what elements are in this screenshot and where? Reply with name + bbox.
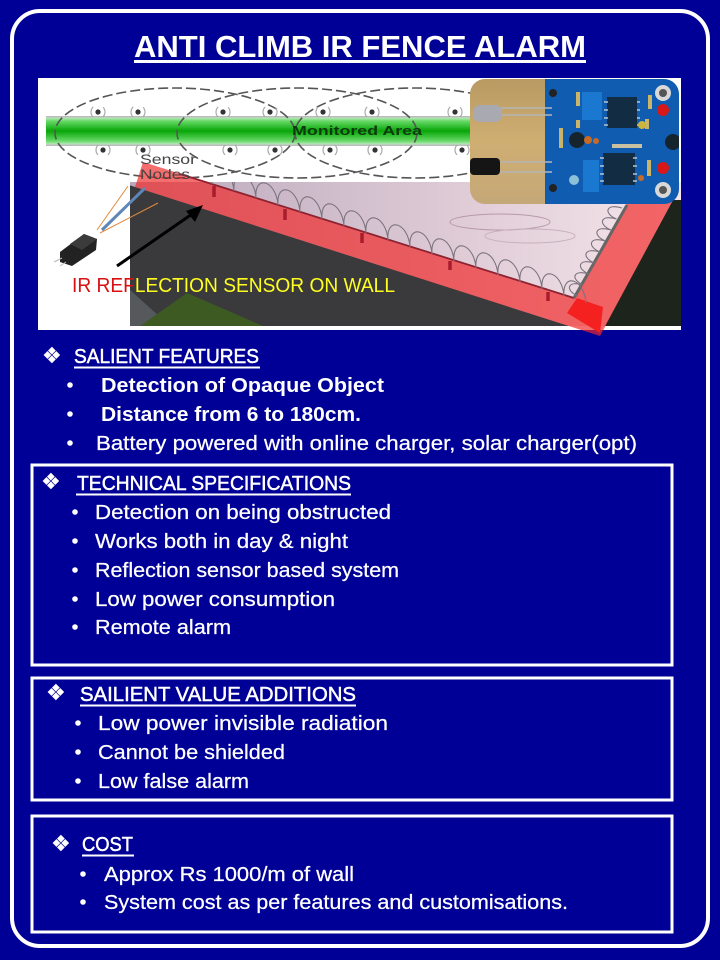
razor wire coil: [212, 169, 622, 303]
cost list: System cost as per features and customisations.: [104, 891, 568, 914]
value additions list: Low false alarm: [98, 770, 249, 793]
photo: IR sensor circuit board: [470, 79, 681, 204]
heading: salient features: SALIENT FEATURES: [74, 345, 259, 368]
wall sensor caption: IR REFLECTION SENSOR ON WALL: [72, 275, 395, 297]
panel: cost: [32, 816, 672, 932]
heading: technical specifications: TECHNICAL SPECIFICATIONS: [77, 472, 351, 495]
panel: technical specifications: [32, 465, 672, 665]
icon: diamond bullet: ❖: [51, 832, 71, 857]
sensor nodes label: Sensor: [140, 151, 196, 167]
heading: cost: COST: [82, 833, 133, 856]
specification list: [72, 501, 399, 639]
sensor node icons: [91, 105, 469, 157]
cost list: Approx Rs 1000/m of wall: [104, 863, 354, 886]
feature list: Detection of Opaque Object: [101, 374, 384, 397]
panel: illustration of wall sensors: [38, 78, 681, 336]
monitored area label: Monitored Area: [292, 123, 423, 138]
feature list: [67, 374, 637, 455]
sensor beam lines: [97, 186, 158, 233]
red wall coping: [135, 162, 673, 336]
icon: diamond bullet: ❖: [42, 344, 62, 369]
icon: IR sensor module: [54, 234, 97, 266]
sensor nodes label: Nodes: [140, 166, 190, 182]
specification list: Remote alarm: [95, 616, 231, 639]
sensor nodes label: [140, 151, 196, 182]
feature list: Battery powered with online charger, solar charger(opt): [96, 432, 637, 455]
specification list: Reflection sensor based system: [95, 559, 399, 582]
specification list: Low power consumption: [95, 588, 335, 611]
value additions list: Cannot be shielded: [98, 741, 285, 764]
value additions list: [75, 712, 388, 793]
specification list: Works both in day & night: [95, 530, 348, 553]
sensor coverage ellipses: [55, 88, 535, 178]
cost list: [80, 863, 568, 914]
black arrow: [117, 205, 203, 266]
section: salient features: [42, 344, 637, 455]
value additions list: Low power invisible radiation: [98, 712, 388, 735]
title: ANTI CLIMB IR FENCE ALARM: [134, 29, 586, 64]
icon: diamond bullet: ❖: [46, 681, 66, 706]
feature list: Distance from 6 to 180cm.: [101, 403, 361, 426]
icon: diamond bullet: ❖: [41, 470, 61, 495]
heading: value additions: SAILIENT VALUE ADDITIONS: [80, 683, 356, 706]
monitored area band: [46, 116, 472, 146]
specification list: Detection on being obstructed: [95, 501, 391, 524]
wall scene: [130, 162, 681, 336]
panel: value additions: [32, 678, 672, 800]
